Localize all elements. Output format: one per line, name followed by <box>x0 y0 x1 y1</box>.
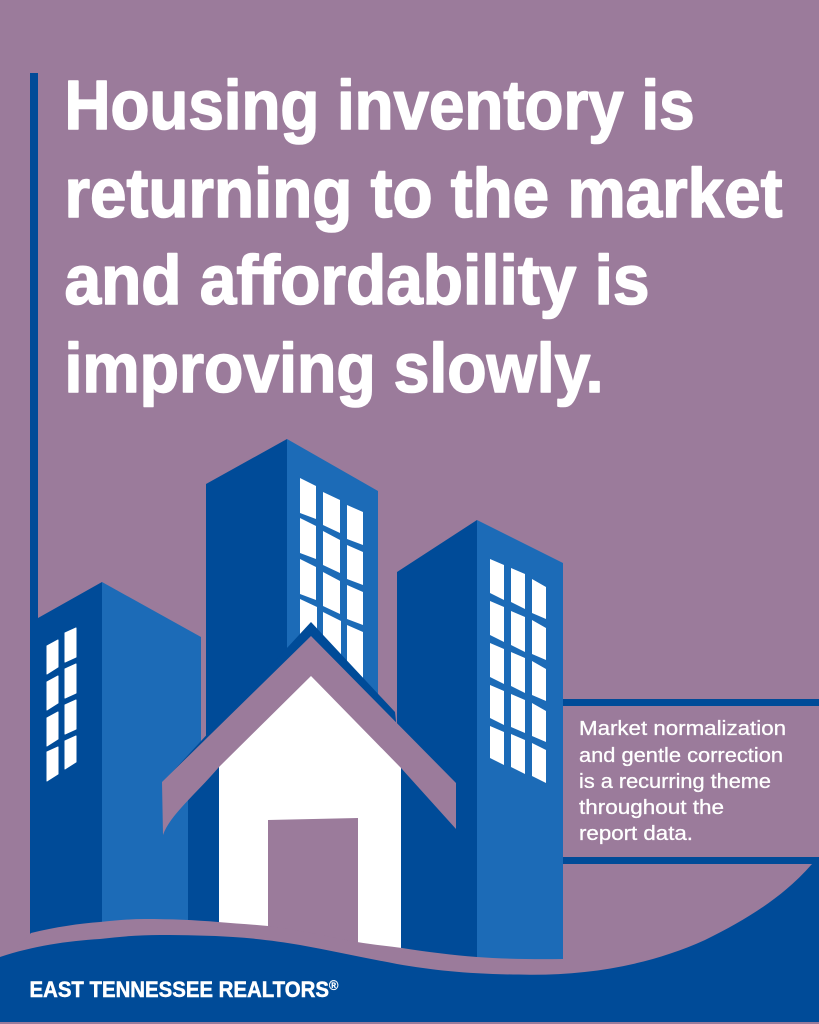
title <box>64 66 782 407</box>
building: right tower <box>397 520 563 965</box>
title: and affordability is <box>64 241 650 319</box>
house <box>162 622 456 960</box>
illustration: buildings and house <box>30 439 563 965</box>
house door <box>268 818 358 960</box>
footer logo text: ® <box>329 977 339 993</box>
callout text: and gentle correction <box>579 745 783 767</box>
accent bar: vertical rule beside the title <box>30 73 38 623</box>
callout text: Market normalization <box>579 718 786 740</box>
title: returning to the market <box>64 154 782 232</box>
title: Housing inventory is <box>64 66 694 144</box>
callout text <box>579 718 786 845</box>
callout text: is a recurring theme <box>579 771 771 793</box>
footer wave <box>0 864 819 1022</box>
building: left tower <box>30 582 201 940</box>
callout: top rule <box>563 699 819 706</box>
roof outline <box>164 622 397 781</box>
roof <box>162 636 456 835</box>
callout text: report data. <box>579 823 693 845</box>
title: improving slowly. <box>64 329 604 407</box>
callout: bottom rule <box>563 857 819 864</box>
footer logo text: EAST TENNESSEE REALTORS <box>30 977 353 1002</box>
callout text: throughout the <box>579 797 724 819</box>
building: centre tower <box>206 439 378 800</box>
ground: curved purple band under the buildings <box>0 919 563 1024</box>
